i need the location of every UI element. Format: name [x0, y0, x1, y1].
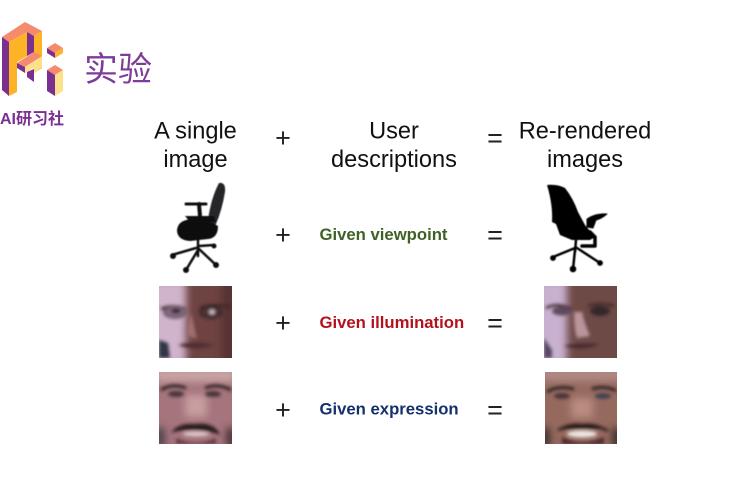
- equals sign: header: =: [487, 123, 503, 153]
- equals sign: =: [487, 395, 503, 425]
- title: 实验: [84, 51, 152, 89]
- column heading: user descriptions: User: [369, 118, 419, 144]
- input face image: neutral smile: [159, 372, 232, 444]
- column heading: a single image: image: [163, 147, 228, 173]
- logo mark: i shape: [47, 43, 63, 96]
- plus sign: +: [275, 395, 291, 425]
- row: expression: [159, 372, 617, 444]
- column heading: re-rendered images: images: [547, 147, 623, 173]
- row: viewpoint: [170, 183, 607, 272]
- row: illumination: [159, 286, 617, 358]
- input chair image: [170, 183, 225, 272]
- plus sign: +: [275, 220, 291, 250]
- logo text: AI研习社: [0, 109, 64, 128]
- label: given viewpoint: Given viewpoint: [320, 225, 448, 244]
- column heading: user descriptions: descriptions: [331, 147, 457, 173]
- plus sign: header: +: [275, 123, 291, 153]
- plus sign: +: [275, 308, 291, 338]
- logo: [0, 22, 64, 128]
- output face image: broad smile: [545, 372, 617, 444]
- logo mark: P shape: [2, 22, 42, 96]
- column heading: a single image: A single: [154, 118, 237, 144]
- equals sign: =: [487, 308, 503, 338]
- output face image: relit: [544, 286, 617, 358]
- column heading: re-rendered images: Re-rendered: [519, 118, 651, 144]
- output chair image: [547, 185, 607, 272]
- label: given illumination: Given illumination: [320, 313, 464, 332]
- input face image: lit from the left: [159, 286, 232, 358]
- label: given expression: Given expression: [320, 400, 459, 418]
- equals sign: =: [487, 220, 503, 250]
